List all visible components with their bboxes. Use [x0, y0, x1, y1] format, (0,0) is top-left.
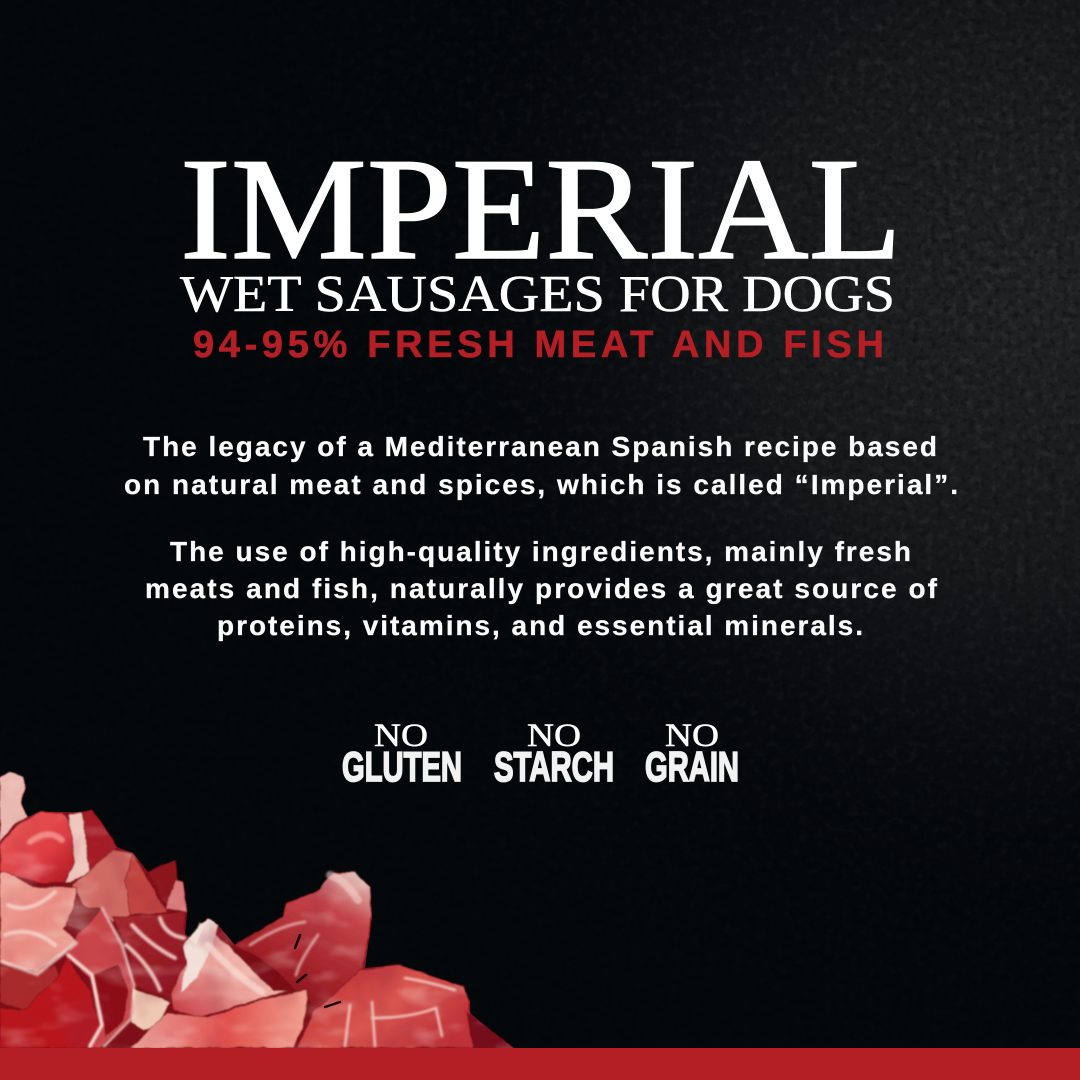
text block: recipe legacy: The legacy of a Mediterranean Spanish recipe based — [143, 431, 937, 462]
meat: slices — [0, 772, 513, 1048]
subtitle: WET SAUSAGES FOR DOGS — [180, 266, 895, 323]
meat: base silhouette — [0, 770, 520, 1050]
claim: no grain: GRAIN — [645, 743, 739, 790]
claim: no starch — [494, 718, 614, 790]
claim: no grain — [645, 718, 739, 790]
claim: no grain: NO — [665, 718, 719, 754]
claim: no gluten: GLUTEN — [342, 743, 462, 790]
claim: no gluten — [342, 718, 462, 790]
text block: ingredients — [145, 536, 938, 641]
meat: dark crevices — [295, 935, 340, 1007]
text block: ingredients: proteins, vitamins, and essential minerals. — [217, 610, 863, 641]
tagline: 94-95% FRESH MEAT AND FISH — [193, 324, 884, 366]
meat: marbling texture — [0, 815, 513, 1048]
image: cured ham slices — [0, 770, 520, 1050]
claim: no gluten: NO — [374, 718, 428, 754]
text block: ingredients: meats and fish, naturally provides a great source of — [145, 573, 938, 604]
claim: no starch: STARCH — [494, 743, 614, 790]
claim: no starch: NO — [527, 718, 581, 754]
meat: highlights — [2, 834, 455, 1046]
text block: recipe legacy: on natural meat and spices, which is called “Imperial”. — [124, 469, 958, 500]
text block: ingredients: The use of high-quality ingredients, mainly fresh — [170, 536, 911, 567]
title: Imperial: IMPERIAL — [180, 128, 902, 290]
footer bar — [0, 1048, 1080, 1080]
text block: recipe legacy — [124, 431, 958, 500]
